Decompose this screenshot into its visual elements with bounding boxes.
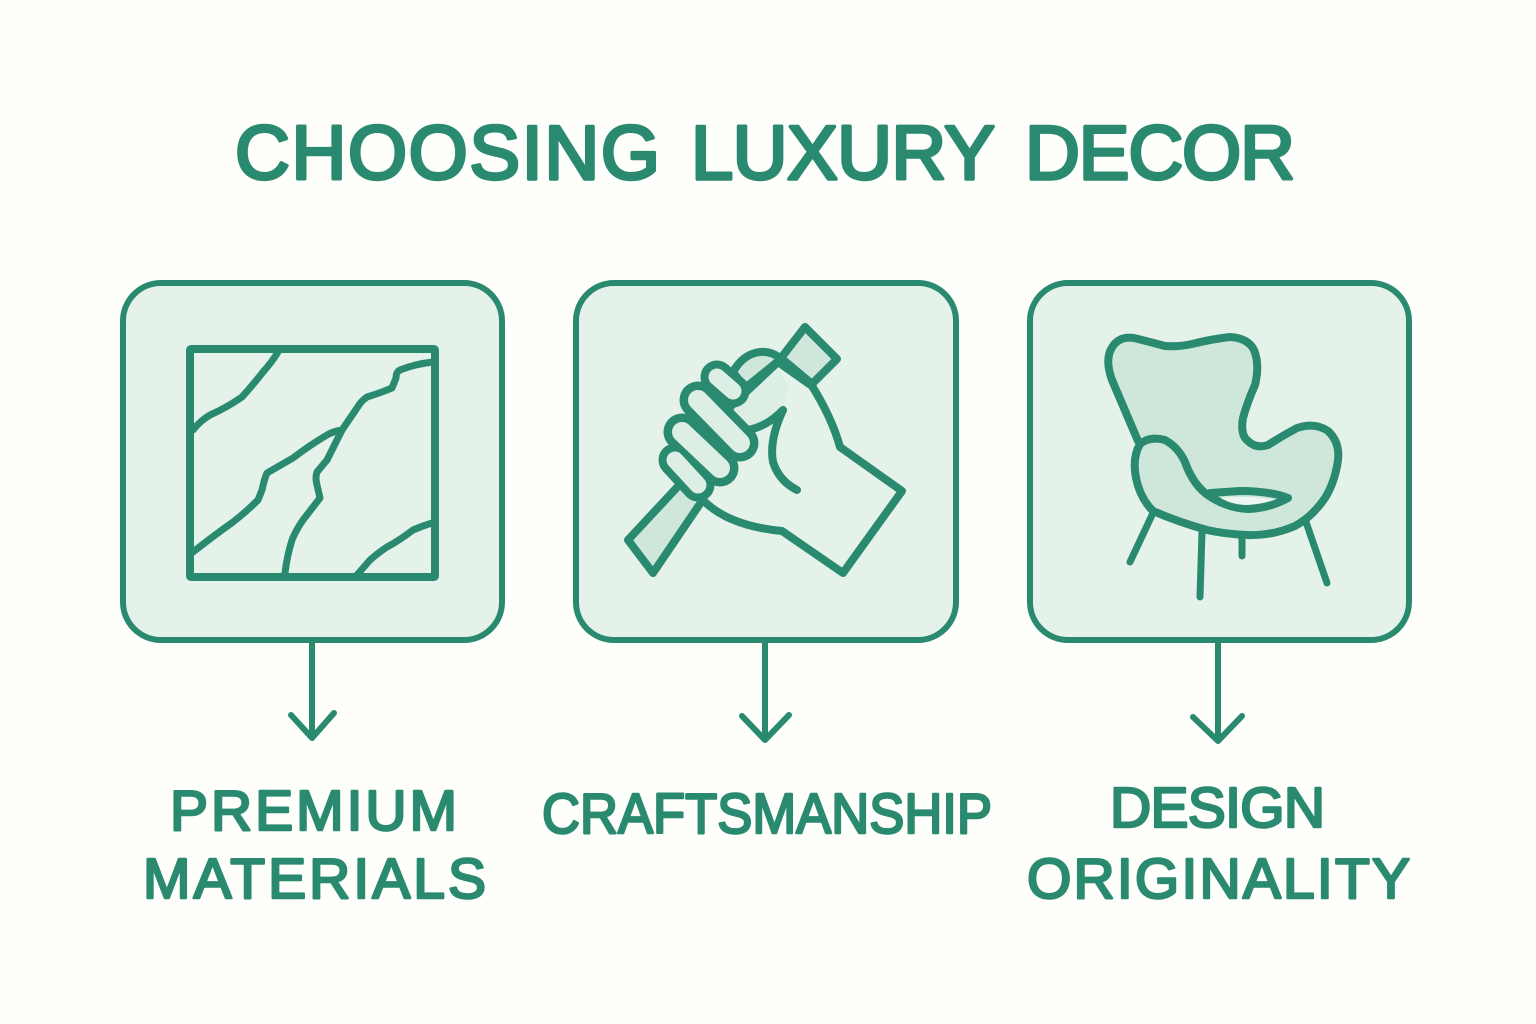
arrow: premium materials xyxy=(291,641,334,738)
hand fill xyxy=(705,362,902,573)
label: craftsmanship: CRAFTSMANSHIP xyxy=(542,782,992,846)
fingers xyxy=(675,377,740,485)
label: premium materials xyxy=(143,779,486,911)
icon: hand gripping tool xyxy=(628,327,902,573)
knuckle arc xyxy=(733,352,781,388)
seat opening xyxy=(1221,497,1274,505)
label: design originality: ORIGINALITY xyxy=(1027,847,1410,911)
tool handle lower end xyxy=(628,482,708,573)
icon: marble slab xyxy=(190,349,435,577)
label: design originality xyxy=(1027,776,1410,911)
arrow: craftsmanship xyxy=(742,641,789,740)
chair legs xyxy=(1130,513,1327,597)
hand outline xyxy=(705,362,902,573)
chair body xyxy=(1108,337,1338,535)
title: LUXURY xyxy=(691,111,995,196)
label: premium materials: PREMIUM xyxy=(170,779,457,843)
title: DECOR xyxy=(1025,111,1295,196)
thumb fill xyxy=(729,365,788,430)
panel: premium materials xyxy=(123,283,502,640)
panel: design originality xyxy=(1030,283,1409,640)
title: CHOOSING xyxy=(235,111,660,196)
title xyxy=(235,111,1295,196)
arrow: design originality xyxy=(1193,641,1242,741)
label: design originality: DESIGN xyxy=(1110,776,1325,840)
icon: armchair xyxy=(1108,337,1338,597)
label: premium materials: MATERIALS xyxy=(143,847,486,911)
tool handle upper end xyxy=(781,327,837,384)
panel: craftsmanship xyxy=(576,283,956,640)
